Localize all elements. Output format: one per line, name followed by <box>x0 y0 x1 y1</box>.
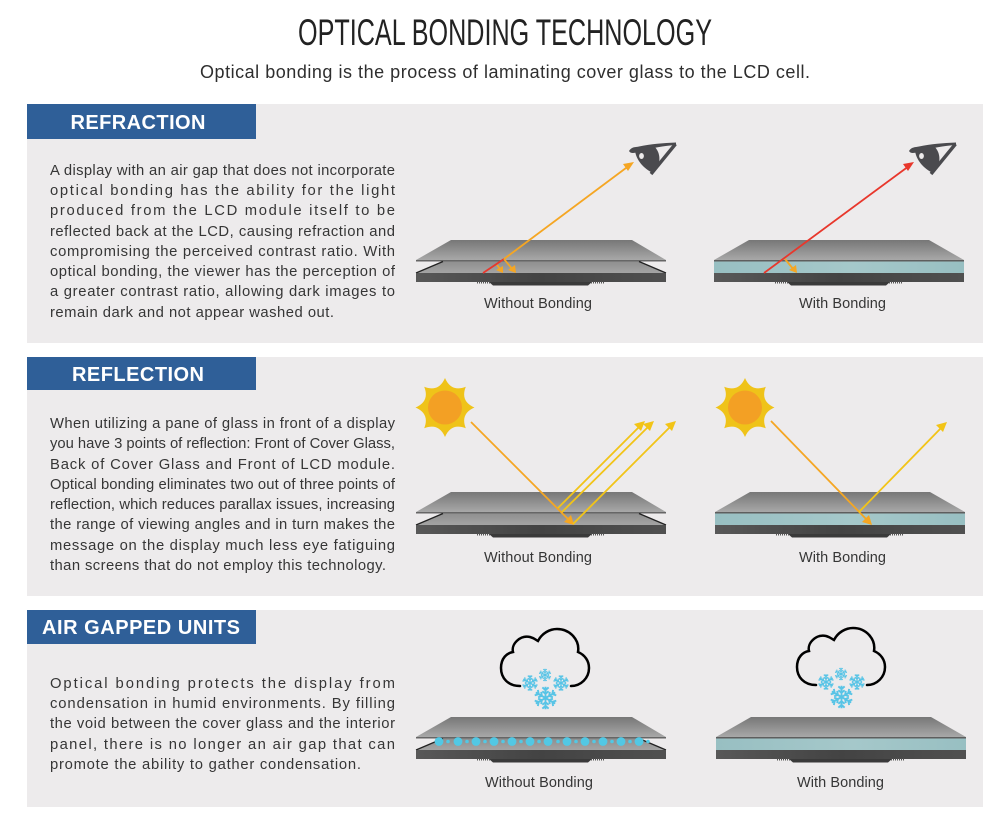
panel: reflection <box>27 357 983 596</box>
diagram: reflection with bonding <box>715 378 965 566</box>
condensation droplets <box>435 737 650 746</box>
diagram: reflection without bonding: Without Bonding <box>484 550 592 566</box>
text block: refraction: produced from the LCD module itself to be <box>50 203 395 219</box>
text block: reflection: Optical bonding eliminates two out of three points of <box>50 477 396 493</box>
diagram: reflection with bonding: With Bonding <box>799 550 886 566</box>
diagram: refraction with bonding <box>714 142 964 312</box>
diagram: air gap without bonding: Without Bonding <box>485 775 593 791</box>
text block: air gapped units <box>50 676 395 773</box>
text block: reflection: When utilizing a pane of glass in front of a display <box>50 416 396 432</box>
heading: reflection <box>27 357 256 390</box>
heading: reflection: REFLECTION <box>72 364 204 386</box>
text block: reflection <box>50 416 396 574</box>
diagram: refraction without bonding <box>416 142 676 312</box>
diagram: air gap with bonding <box>716 628 966 791</box>
heading: air gapped units <box>27 610 256 644</box>
text block: refraction <box>50 163 396 321</box>
title: OPTICAL BONDING TECHNOLOGY <box>298 12 712 53</box>
text block: reflection: Back of Cover Glass and Front of LCD module. <box>50 457 395 473</box>
text block: reflection: message on the display much less eye fatiguing <box>50 538 395 554</box>
text block: air gapped units: Optical bonding protects the display from <box>50 676 395 692</box>
text block: refraction: A display with an air gap that does not incorporate <box>50 163 395 179</box>
text block: reflection: reflection, which reduces parallax issues, increasing <box>50 497 395 513</box>
heading: refraction: REFRACTION <box>70 112 206 134</box>
diagram: reflection without bonding <box>416 378 676 566</box>
text block: air gapped units: the void between the cover glass and the interior <box>50 716 395 732</box>
panel: refraction <box>27 104 983 343</box>
subtitle: Optical bonding is the process of laminating cover glass to the LCD cell. <box>200 62 810 82</box>
text block: air gapped units: promote the ability to gather condensation. <box>50 757 361 773</box>
text block: refraction: a greater contrast ratio, allowing dark images to <box>50 284 395 300</box>
diagram: air gap with bonding: With Bonding <box>797 775 884 791</box>
text block: refraction: compromising the perceived contrast ratio. With <box>50 244 395 260</box>
text block: air gapped units: condensation in humid environments. By filling <box>50 696 395 712</box>
text block: refraction: remain dark and not appear washed out. <box>50 305 334 321</box>
text block: reflection: you have 3 points of reflection: Front of Cover Glass, <box>50 436 395 452</box>
panel: air gapped units <box>27 610 983 807</box>
heading: refraction <box>27 104 256 139</box>
text block: reflection: than screens that do not employ this technology. <box>50 558 386 574</box>
diagram: air gap without bonding <box>416 629 666 791</box>
diagram: refraction with bonding: With Bonding <box>799 296 886 312</box>
heading: air gapped units: AIR GAPPED UNITS <box>42 617 240 639</box>
text block: refraction: reflected back at the LCD, causing refraction and <box>50 224 395 240</box>
text block: refraction: optical bonding has the ability for the light <box>50 183 395 199</box>
text block: air gapped units: panel, there is no longer an air gap that can <box>50 737 395 753</box>
text block: refraction: optical bonding, the viewer has the perception of <box>50 264 396 280</box>
diagram: refraction without bonding: Without Bonding <box>484 296 592 312</box>
text block: reflection: the range of viewing angles and in turn makes the <box>50 517 395 533</box>
